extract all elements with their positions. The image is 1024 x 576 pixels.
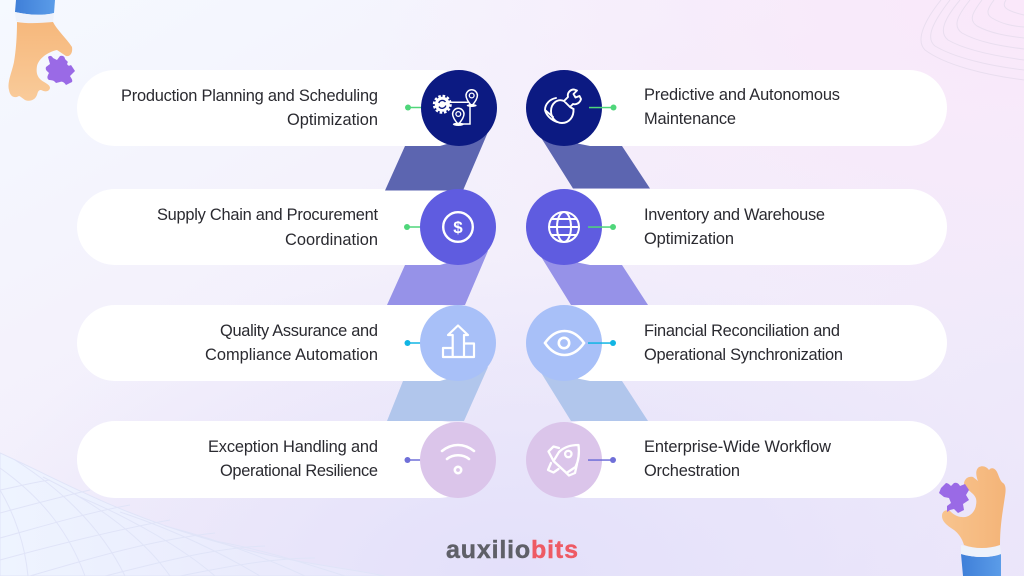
label: supply chain: Coordination: [285, 231, 378, 249]
decorative lattice: bottom left: [0, 453, 385, 576]
row 1 right pill: [545, 70, 947, 146]
circle: wifi icon: [420, 422, 496, 498]
circle: maintenance wrench icon: [526, 70, 602, 146]
row 1 left connector dot: [405, 104, 422, 110]
row 3 right connector dot: [588, 340, 616, 346]
row 1 right connector dot: [589, 104, 616, 110]
row 3 right pill: [545, 305, 947, 381]
connector ribbon: right 1: [540, 136, 650, 188]
hand holding puzzle: bottom right: [942, 466, 1006, 576]
label: predictive maintenance: Maintenance: [644, 110, 736, 128]
label: financial reconciliation: Financial Reconciliation and: [644, 322, 840, 340]
circle: globe icon: [526, 189, 602, 265]
circle: rocket icon: [526, 422, 602, 498]
connector ribbon: left 1: [385, 132, 488, 190]
row 4 right pill: [545, 421, 947, 498]
puzzle piece: bottom right: [939, 483, 969, 513]
circle: production planning icon: [421, 70, 497, 146]
label: quality assurance: Quality Assurance and: [220, 322, 378, 340]
label: quality assurance: Compliance Automation: [205, 346, 378, 364]
connector ribbon: left 3: [387, 367, 488, 421]
connector ribbon: left 2: [387, 251, 488, 305]
label: exception handling: Exception Handling and: [208, 438, 378, 456]
label: enterprise workflow: Enterprise-Wide Workflow: [644, 438, 831, 456]
right connector lines: [588, 104, 616, 463]
label: exception handling: Operational Resilience: [220, 462, 378, 480]
label: production planning: Production Planning and Scheduling: [121, 87, 378, 105]
row 2 left connector dot: [404, 224, 421, 230]
label: inventory: Inventory and Warehouse: [644, 206, 825, 224]
label: financial reconciliation: Operational Synchronization: [644, 346, 843, 364]
label: enterprise workflow: Orchestration: [644, 462, 740, 480]
row 3 left connector dot: [404, 340, 421, 346]
decorative lattice: top right: [921, 0, 1024, 80]
label: inventory: Optimization: [644, 230, 734, 248]
connector ribbon: right 3: [540, 371, 648, 421]
connector ribbon: right 2: [540, 255, 648, 305]
row 4 left connector dot: [404, 457, 421, 463]
puzzle piece: top left: [46, 56, 75, 85]
row 4 left pill: [77, 421, 477, 498]
circle: dollar icon: [420, 189, 496, 265]
label: supply chain: Supply Chain and Procurement: [157, 206, 378, 224]
circle: eye icon: [526, 305, 602, 381]
row 2 right connector dot: [588, 224, 616, 230]
logo: auxiliobits: [446, 536, 578, 564]
hand holding puzzle: top left: [9, 0, 72, 101]
row 4 right connector dot: [588, 457, 616, 463]
label: production planning: Optimization: [287, 111, 378, 129]
row 2 left pill: [77, 189, 477, 265]
label: predictive maintenance: Predictive and Autonomous: [644, 86, 840, 104]
row 1 left pill: [77, 70, 477, 146]
circle: dollar icon: $: [453, 218, 463, 237]
row 3 left pill: [77, 305, 477, 381]
row 2 right pill: [545, 189, 947, 265]
circle: quality arrow bars icon: [420, 305, 496, 381]
